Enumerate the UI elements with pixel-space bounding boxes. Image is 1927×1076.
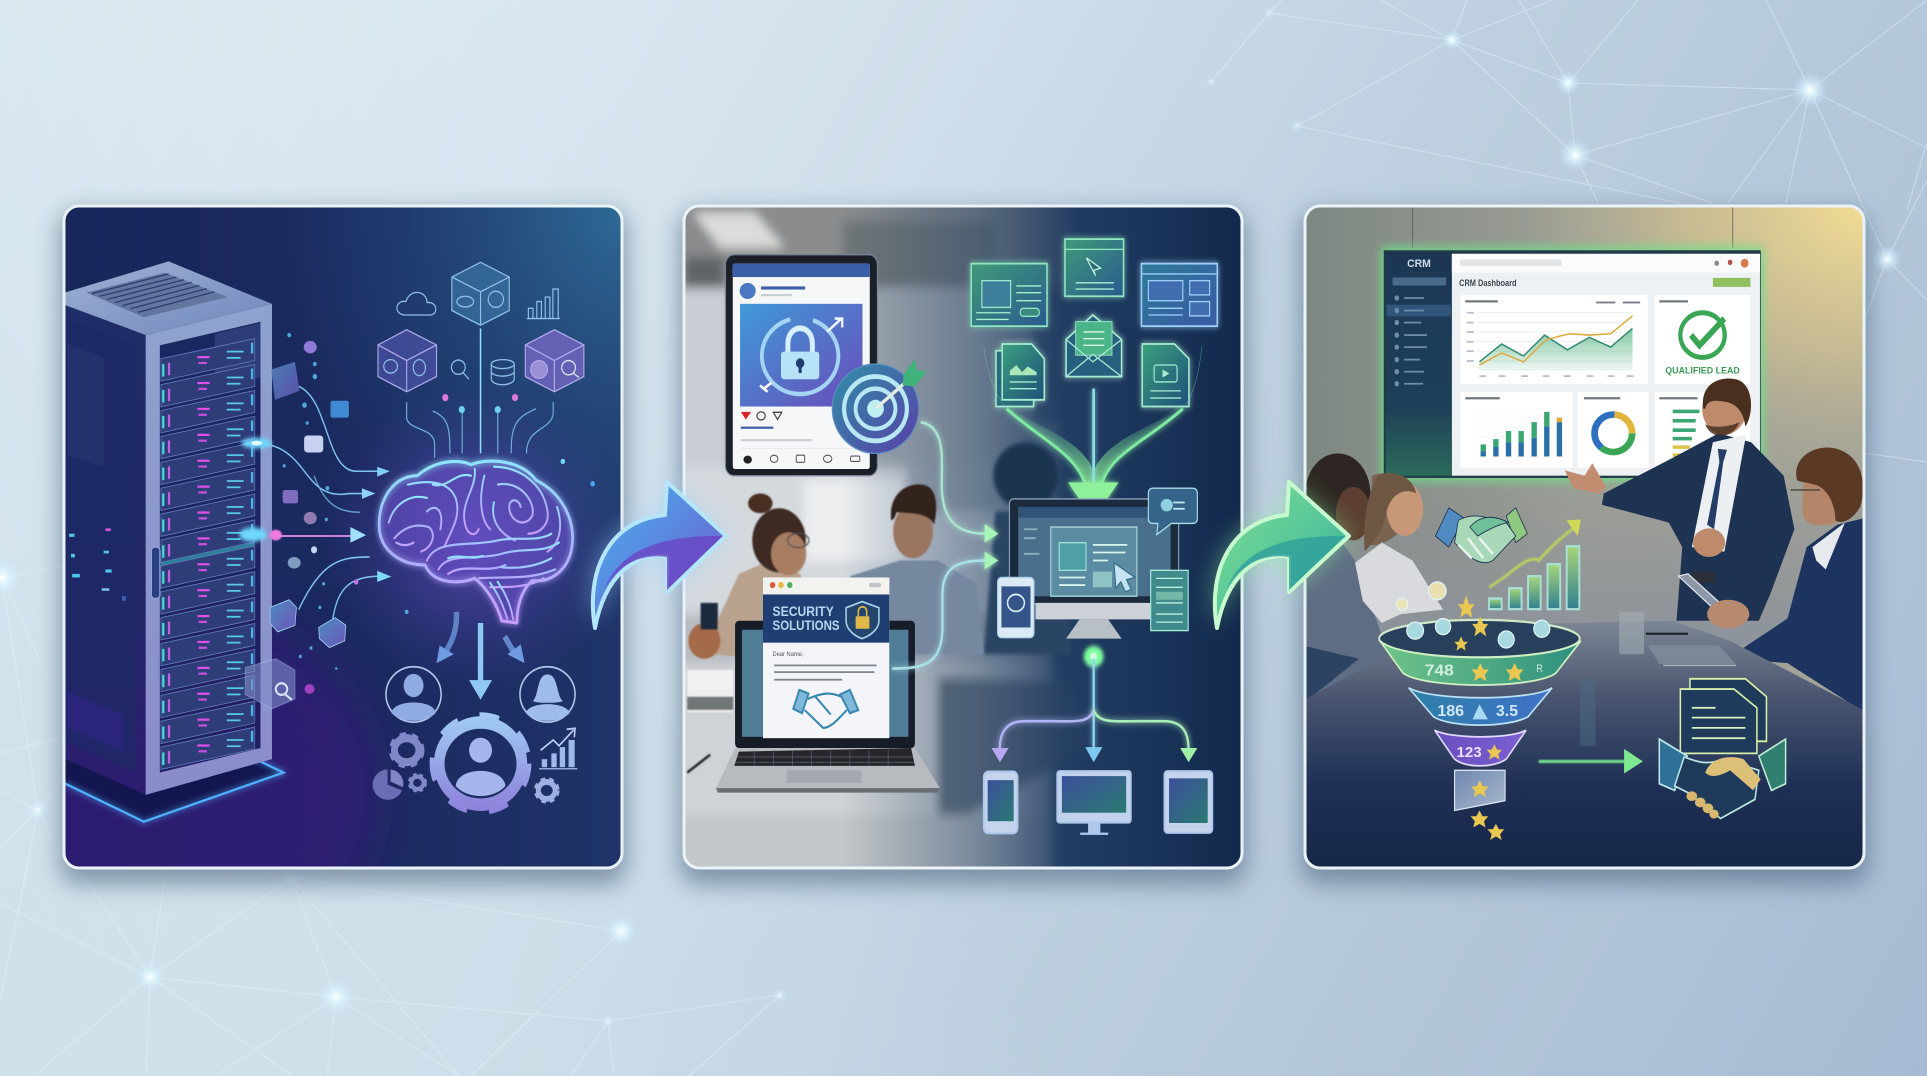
- conference table: [1301, 612, 1868, 873]
- server rack: [61, 261, 283, 822]
- panel border 1: [64, 206, 622, 868]
- panel border 2: [684, 206, 1242, 868]
- target icon: [832, 359, 927, 453]
- office photo backdrop: [686, 208, 1064, 866]
- presenter: [1565, 378, 1794, 621]
- green arrow to deal: [1539, 749, 1643, 773]
- phone and document companions: [998, 488, 1197, 638]
- CRM dashboard screen: CRM Dashboard: [1459, 277, 1517, 288]
- laptop with email: SOLUTIONS: [773, 617, 840, 633]
- arrow: panel 2 to panel 3: [1215, 482, 1349, 628]
- end devices: [984, 771, 1212, 834]
- lead funnel: 186: [1437, 702, 1464, 720]
- output arrows: [437, 612, 525, 700]
- panel shadows: [60, 212, 1868, 884]
- lead funnel: 123: [1456, 743, 1482, 760]
- handshake hologram: [1435, 508, 1527, 563]
- floating data cubes: [245, 333, 595, 709]
- laptop with email: Dear Name,: [773, 651, 804, 658]
- CRM dashboard screen: [1381, 247, 1763, 481]
- laptop with email: [716, 577, 940, 793]
- attendees left: [1301, 453, 1443, 703]
- lead funnel: 3.5: [1496, 702, 1518, 720]
- panel border 3: [1305, 206, 1864, 868]
- connector from target: [892, 422, 998, 669]
- laptop with email: SECURITY: [773, 603, 834, 619]
- server glow points: [239, 438, 282, 542]
- growth bars: [1489, 519, 1581, 609]
- document and closing handshake: [1659, 679, 1786, 819]
- brain: [379, 461, 573, 623]
- connectors into brain: [407, 328, 553, 458]
- attendee right: [1678, 447, 1864, 712]
- icon row: cloud, cubes, database: [378, 262, 584, 392]
- green funnel flow to monitor: [984, 346, 1202, 498]
- desktop monitor with landing page: [1009, 499, 1179, 639]
- data flow arrows into brain: [245, 386, 391, 632]
- lead funnel: [1379, 582, 1581, 840]
- icons: people, gears, pie, bars: [373, 667, 577, 810]
- content template cards: [971, 239, 1217, 407]
- social media tablet: [725, 255, 877, 476]
- panel: CRM dashboard and qualified leads: [1301, 203, 1868, 873]
- CRM dashboard screen: QUALIFIED LEAD: [1665, 365, 1740, 376]
- CRM dashboard screen: CRM: [1407, 259, 1431, 270]
- people in background: [687, 484, 984, 773]
- data particles left: [69, 528, 126, 601]
- panel: campaign content distribution: [670, 190, 1248, 886]
- lead funnel: 748: [1425, 662, 1454, 680]
- arrow: panel 1 to panel 2: [593, 482, 726, 628]
- lead funnel: R: [1536, 664, 1543, 675]
- panel: data and AI processing: [66, 208, 620, 866]
- distribution tree: [991, 646, 1197, 762]
